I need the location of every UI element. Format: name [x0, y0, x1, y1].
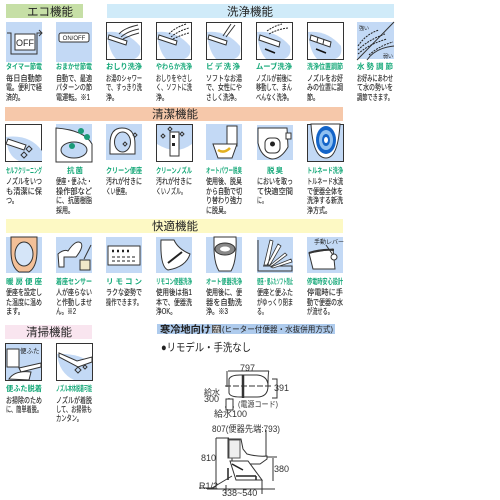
feature: bidet wash [206, 22, 242, 102]
feature: nozzle removal: して、お掃除も [56, 404, 92, 414]
feature: deodorizing: に。 [257, 196, 267, 205]
feature: rear wash [106, 22, 142, 102]
feature: tornado wash: トルネード水流 [307, 176, 343, 186]
feature: wash position adjustment: 洗浄位置調節 [307, 61, 343, 71]
feature: soft wash: やわらか洗浄 [156, 61, 192, 71]
feature: moving wash: ノズルが前後に [256, 73, 292, 83]
side view outline [199, 430, 277, 494]
header: washing functions [107, 4, 394, 18]
header: eco functions: エコ機能 [27, 4, 73, 18]
feature: bidet wash: ソフトなお湯 [206, 73, 242, 83]
diagram: top view dimensions: 391 [274, 383, 289, 393]
feature: timer power saving: 毎日自動節 [6, 73, 42, 83]
feature: water pressure adjustment: 調節できます。 [357, 92, 393, 102]
feature: clean toilet seat: クリーン便座 [106, 165, 142, 175]
feature: auto toilet flush: 器を自動洗 [206, 297, 242, 307]
icon: remote control [106, 237, 142, 273]
feature: auto power deodorizing: オートパワー脱臭 [206, 165, 242, 175]
icon: antibacterial seat [56, 124, 92, 162]
icon: self cleaning nozzle [6, 124, 42, 162]
feature: soft close seat and lid: 便座と便ふた [257, 287, 293, 297]
feature: auto toilet flush: 浄。※3 [206, 306, 228, 316]
feature: clean toilet seat: 汚れが付きに [106, 176, 142, 186]
feature: water pressure adjustment: 水勢調節 [357, 61, 394, 71]
header: comfort functions: 快適機能 [152, 219, 198, 233]
feature: automatic power saving: 自動で、最適 [56, 73, 92, 83]
icon: soft wash nozzle [156, 22, 192, 60]
feature: auto toilet flush [206, 237, 242, 316]
feature: power outage design [307, 237, 344, 316]
diagram: side view dimensions: 807(便器先端:793) [212, 423, 280, 434]
header: cleaning functions [5, 325, 92, 339]
feature: remote control [106, 237, 142, 307]
icon: clean nozzle [156, 124, 192, 162]
feature: seat sensor: と作動しませ [56, 297, 92, 307]
feature: rear wash: おしり洗浄 [106, 61, 142, 71]
feature: clean nozzle [156, 124, 192, 196]
feature: power outage design: 動で便器の水 [307, 297, 343, 307]
feature: remote control: ラクな姿勢で [106, 287, 142, 297]
icon: detachable lid: 便ふた [20, 346, 40, 355]
feature: tornado wash [307, 124, 344, 215]
feature: deodorizing [257, 125, 293, 205]
feature: clean nozzle: くいノズル。 [156, 186, 186, 196]
feature: rear wash: お湯のシャワー [106, 73, 142, 83]
feature: soft wash: く、ソフトに洗 [156, 82, 192, 92]
feature: power outage design: 停電時に手 [307, 287, 343, 297]
feature: self cleaning: つ。 [6, 196, 18, 205]
feature: antibacterial: 便座・便ふた・ [56, 176, 92, 186]
icon: clean seat [106, 124, 142, 160]
feature: moving wash: 移動して、まん [256, 82, 292, 92]
feature: self cleaning: も清潔に保 [6, 186, 42, 196]
feature: bidet wash: ビデ洗浄 [206, 61, 240, 71]
feature: power outage design: が流せる。 [307, 306, 333, 316]
feature: clean toilet seat: くい便座。 [106, 186, 130, 196]
feature: tornado wash: 洗浄する新洗 [307, 195, 343, 205]
icon: moving nozzle [256, 22, 292, 60]
feature: water pressure adjustment: て水の勢いを [357, 82, 393, 92]
feature: moving wash: べんなく洗浄。 [256, 92, 292, 102]
feature: seat sensor: 着座センサー [56, 276, 92, 286]
feature: clean nozzle: クリーンノズル [156, 165, 192, 175]
header: cleaning functions: 清掃機能 [26, 325, 72, 339]
feature: self cleaning [6, 124, 42, 205]
feature: removable toilet lid: 便ふた脱着 [6, 383, 42, 393]
diagram: side view dimensions [199, 423, 289, 498]
feature: wash position adjustment: 節。 [307, 92, 319, 102]
feature: self cleaning: ノズルをいつ [6, 176, 42, 186]
header: cleanliness functions: 清潔機能 [152, 107, 198, 121]
diagram: top view dimensions: 給水 [204, 387, 220, 397]
diagram: top view dimensions: 300 [204, 394, 219, 404]
feature: nozzle removal: カンタン。 [56, 414, 82, 423]
feature: antibacterial: 抗菌 [67, 165, 84, 175]
icon: removable nozzle [56, 344, 92, 380]
icon: water strength [357, 22, 394, 60]
feature: rear wash: 浄。 [106, 92, 118, 102]
feature: antibacterial: 採用。 [56, 205, 74, 215]
feature: remote toilet flush: リモコン便器洗浄 [156, 276, 192, 286]
icon: manual lever: 手動レバー [314, 238, 344, 246]
feature: timer power saving: 済的。 [6, 92, 24, 102]
feature: water pressure adjustment [357, 22, 394, 102]
icon: water strength: 強い [359, 25, 369, 32]
feature: heated seat: た温度に温め [6, 297, 42, 307]
feature: seat sensor: 人が座らない [56, 287, 92, 297]
icon: slow closing lid [257, 237, 293, 273]
feature: wash position adjustment: ノズルをお好 [307, 73, 343, 83]
feature: timer power saving: タイマー節電 [6, 61, 42, 71]
feature: bidet wash: さしく洗浄。 [206, 92, 240, 102]
icon: rear wash nozzle [106, 22, 142, 60]
feature: power outage design: 停電時安心設計 [307, 276, 343, 286]
feature: deodorizing: においを取っ [257, 177, 293, 186]
feature: moving wash: ムーブ洗浄 [256, 61, 292, 71]
diagram: top view dimensions: 給水100 [214, 408, 247, 419]
feature: auto power deodorizing [206, 124, 242, 215]
feature: heated seat [6, 237, 42, 316]
feature: soft close seat and lid: る。 [257, 307, 267, 316]
header: comfort functions [6, 219, 343, 233]
feature: rear wash: で、すっきり洗 [106, 82, 142, 92]
icon: on off switch: ON/OFF [63, 36, 86, 42]
feature: timer power saving: 電。便利で経 [6, 82, 42, 92]
feature: wash position adjustment [307, 22, 344, 102]
feature: seat sensor: ん。※2 [56, 307, 76, 316]
feature: tornado wash: 浄方式。 [307, 205, 331, 215]
feature: removable toilet lid [6, 344, 42, 414]
feature: remote control: リモコン [106, 277, 142, 286]
feature: deodorizing: て快適空間 [257, 186, 293, 196]
banner: cold region model: 流 [212, 324, 220, 334]
feature: wash position adjustment: みの位置に調 [307, 82, 343, 92]
feature: auto power deodorizing: 使用後、脱臭 [206, 176, 242, 186]
feature: soft wash: おしりをやさし [156, 74, 192, 83]
feature: heated seat: 暖房便座 [6, 276, 42, 286]
feature: auto power deodorizing: から自動で切 [206, 186, 242, 196]
feature: seat sensor [56, 237, 92, 316]
feature: automatic power saving: おまかせ節電 [56, 61, 92, 71]
feature: soft close seat and lid [257, 237, 293, 316]
diagram: side view dimensions: R1/2 [199, 481, 218, 491]
icon: position adjustment [308, 22, 344, 60]
feature: removable toilet lid: に、簡単着脱。 [6, 404, 42, 414]
icon: auto flush [206, 237, 242, 273]
header: cleanliness functions [5, 107, 343, 121]
feature: nozzle removal [56, 344, 92, 423]
icon: bidet nozzle [206, 22, 242, 60]
header: eco functions [6, 4, 83, 18]
feature: antibacterial: に、抗菌樹脂 [56, 195, 92, 205]
icon: deodorizer [257, 125, 293, 160]
feature: heated seat: ます。 [6, 307, 24, 316]
icon: seat sensor [56, 237, 92, 273]
diagram: side view dimensions: 810 [201, 453, 216, 463]
top view outline [225, 371, 277, 410]
icon: auto power deodorizer [206, 124, 242, 160]
icon: heated seat [6, 237, 42, 273]
diagram: top view dimensions: 797 [240, 363, 255, 373]
icon: remote flush [156, 237, 192, 273]
feature: automatic power saving [56, 22, 92, 102]
feature: removable toilet lid: お掃除のため [6, 395, 42, 405]
feature: soft wash [156, 22, 192, 102]
feature: antibacterial [56, 124, 92, 215]
feature: deodorizing: 脱臭 [267, 165, 284, 175]
feature: soft close seat and lid: がゆっくり閉ま [257, 297, 293, 307]
feature: remote toilet flush: 本で、便器洗 [156, 297, 192, 307]
feature: antibacterial: 操作部など [56, 186, 92, 196]
feature: nozzle removal: ノズルが着脱 [56, 395, 92, 405]
icon: water strength: 弱い [383, 54, 393, 60]
feature: auto toilet flush: オート便器洗浄 [206, 276, 242, 286]
feature: auto toilet flush: 使用後に、便 [206, 287, 242, 297]
feature: tornado wash: トルネード洗浄 [307, 165, 343, 175]
feature: water pressure adjustment: お好みにあわせ [357, 73, 393, 83]
feature: automatic power saving: パターンの節 [56, 82, 92, 92]
subheading: remodel without hand wash: ●リモデル・手洗なし [161, 340, 251, 354]
feature: auto power deodorizing: に脱臭。 [206, 205, 230, 215]
feature: clean toilet seat [106, 124, 142, 196]
feature: timer power saving [6, 22, 42, 102]
feature: remote control: 操作できます。 [106, 297, 142, 307]
diagram: top view dimensions: (電源コード) [238, 400, 278, 409]
feature: clean nozzle: 汚れが付きに [156, 176, 192, 186]
feature: moving wash [256, 22, 292, 102]
diagram: top view dimensions [204, 363, 289, 419]
feature: heated seat: 便座を設定し [6, 287, 42, 297]
feature: remote toilet flush: 使用後は指1 [156, 287, 192, 297]
feature: soft wash: 浄。 [156, 92, 168, 102]
feature: remote toilet flush [156, 237, 192, 316]
banner: cold region model: 寒冷地向け [160, 323, 211, 336]
feature: bidet wash: で、女性にや [206, 82, 242, 92]
icon: timer off: OFF [16, 38, 34, 48]
banner: cold region model [157, 323, 335, 336]
diagram: side view dimensions: 338~540 [222, 488, 257, 498]
feature: tornado wash: で便器全体を [307, 186, 343, 196]
header: washing functions: 洗浄機能 [227, 4, 273, 18]
diagram: side view dimensions: 380 [274, 464, 289, 474]
banner: cold region model: (ヒーター付便器・水抜併用方式) [222, 324, 333, 334]
feature: remote toilet flush: 浄OK。 [156, 306, 176, 316]
text: 便座・便ふたソフト閉止 [257, 276, 293, 286]
icon: tornado bowl [308, 124, 344, 162]
feature: auto power deodorizing: り替わり強力 [206, 195, 242, 205]
feature: automatic power saving: 電運転。※1 [56, 92, 90, 102]
feature: self cleaning: セルフクリーニング [6, 165, 42, 175]
feature: nozzle removal: ノズル本体脱着可能 [56, 383, 92, 393]
